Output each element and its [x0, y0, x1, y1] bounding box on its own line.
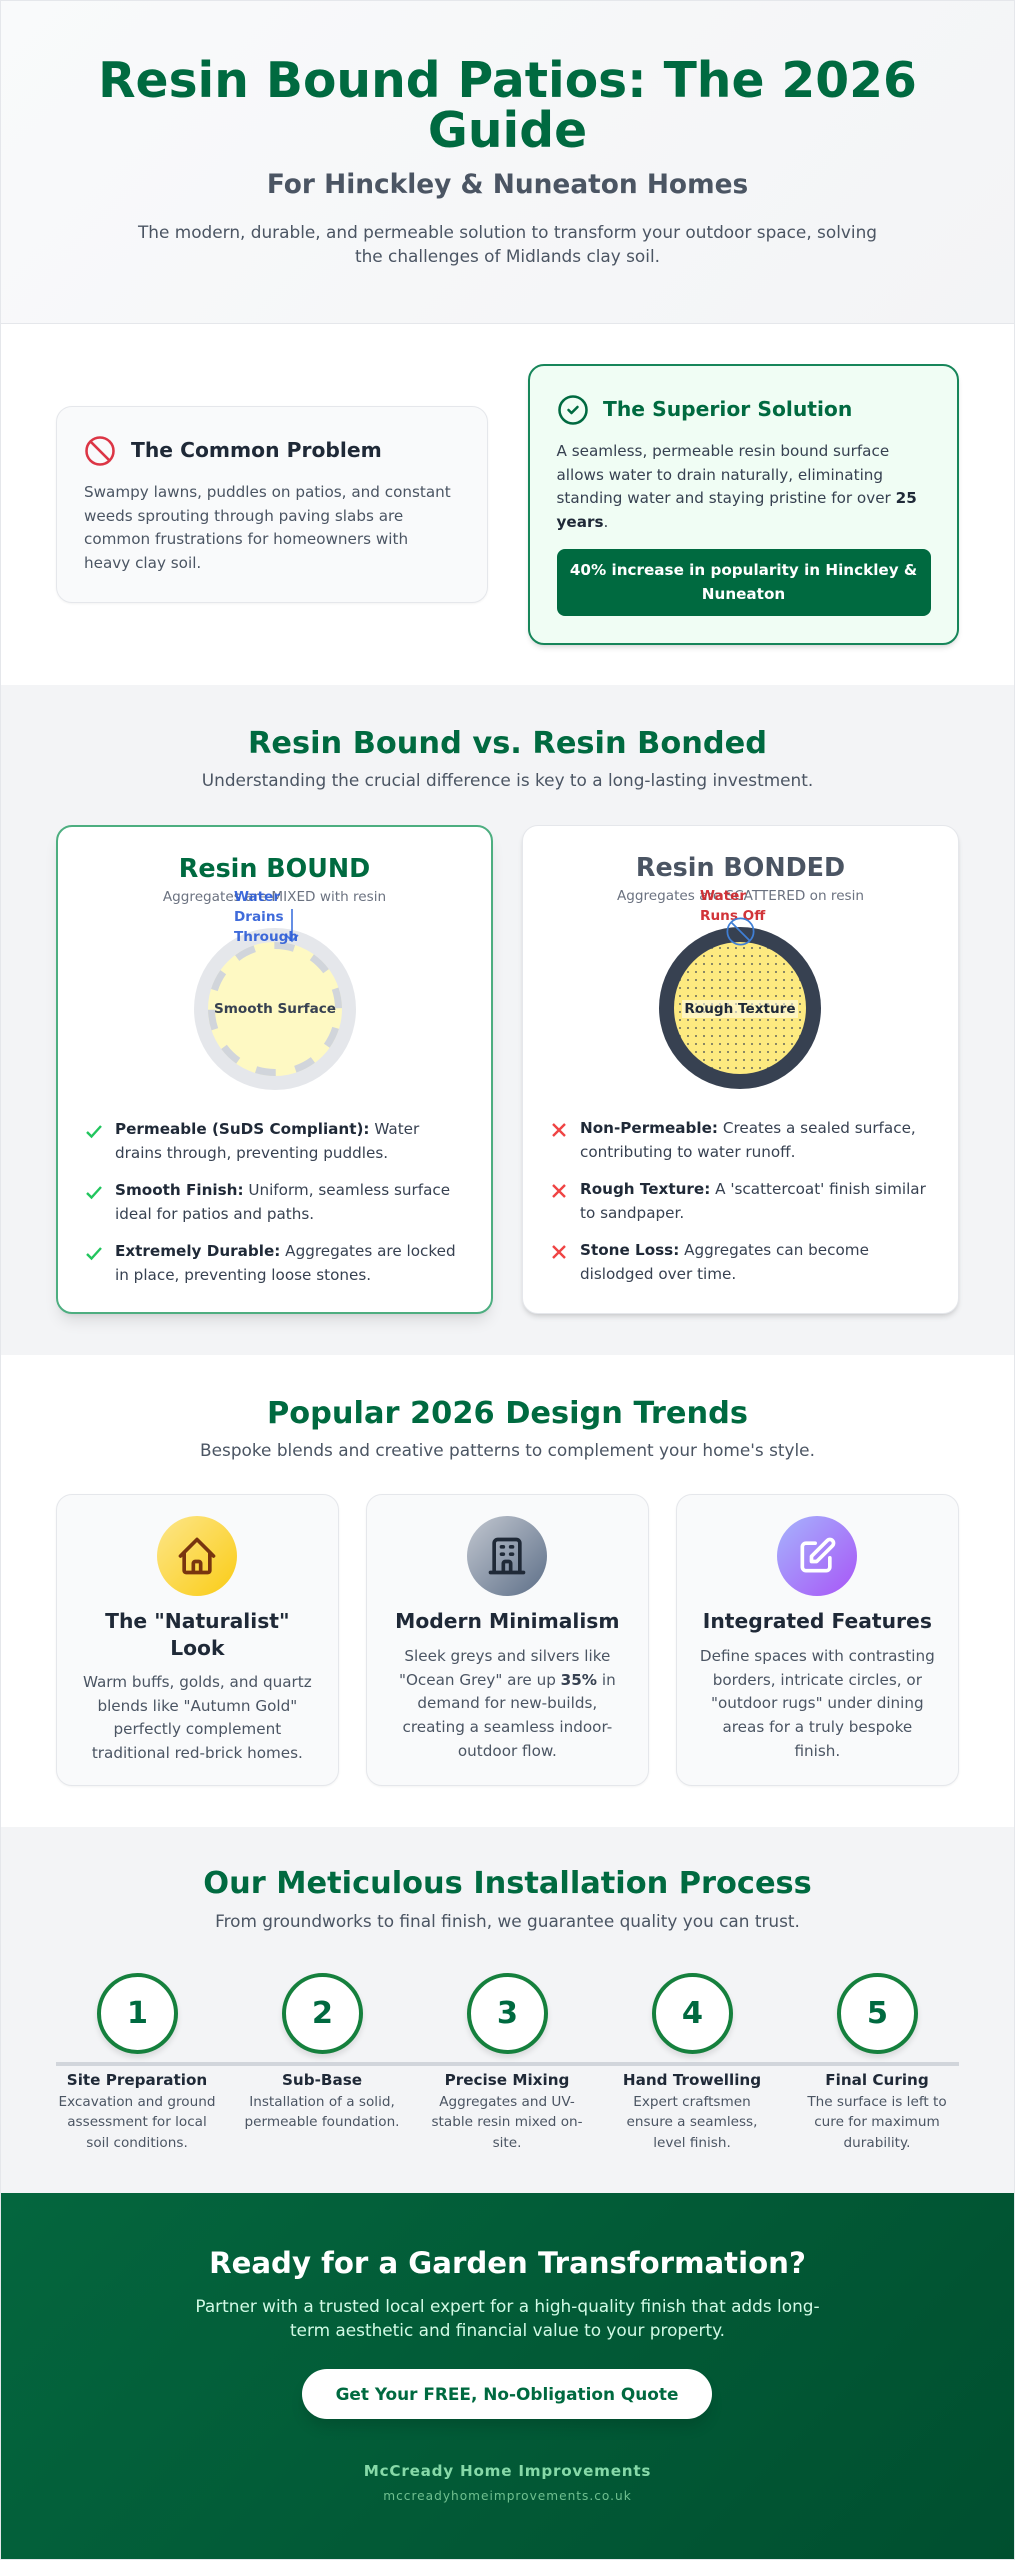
statistic callout: 40% increase in popularity in Hinckley &	[570, 561, 917, 579]
step 5 text: durability.	[844, 2135, 910, 2151]
icon: pencil	[777, 1516, 857, 1596]
benefit: permeable: Permeable (SuDS Compliant): Water	[115, 1120, 419, 1138]
trend heading: Modern Minimalism	[395, 1609, 620, 1633]
section heading: Our Meticulous Installation Process	[203, 1866, 812, 1901]
drawback: stone loss	[580, 1241, 869, 1283]
solution text	[556, 442, 917, 531]
diagram label: Rough Texture	[684, 1001, 796, 1017]
benefit: smooth finish: ideal for patios and paths.	[115, 1205, 314, 1223]
trend heading: The "Naturalist"	[105, 1609, 290, 1633]
CTA button	[302, 2369, 712, 2419]
CTA text: Partner with a trusted local expert for a high-quality finish that adds long-	[195, 2296, 820, 2316]
icon: cross	[552, 1184, 566, 1198]
section subheading: Understanding the crucial difference is key to a long-lasting investment.	[202, 770, 813, 790]
step 4 number	[652, 1973, 733, 2054]
panel: problem and solution	[0, 324, 1015, 685]
step 2 title: Sub-Base	[282, 2071, 362, 2089]
water label: Water	[234, 889, 280, 905]
trend card: naturalist	[56, 1494, 339, 1786]
section subheading: Bespoke blends and creative patterns to complement your home's style.	[200, 1440, 815, 1460]
icon: water blocked	[726, 918, 754, 946]
trend text: Define spaces with contrasting	[700, 1647, 935, 1665]
benefit: smooth finish	[115, 1181, 450, 1223]
step 1 title: Site Preparation	[67, 2071, 207, 2089]
drawback: rough texture: to sandpaper.	[580, 1204, 684, 1222]
problem heading: The Common Problem	[131, 438, 382, 462]
problem text: Swampy lawns, puddles on patios, and constant	[84, 483, 451, 501]
step 4 title: Hand Trowelling	[623, 2071, 761, 2089]
diagram: rough texture circle	[659, 927, 821, 1089]
trend text: "Ocean Grey" are up 35% in	[399, 1671, 616, 1689]
trend text: Sleek greys and silvers like	[404, 1647, 610, 1665]
trend text: demand for new-builds,	[417, 1694, 597, 1712]
step 1 text: assessment for local	[67, 2114, 207, 2130]
CTA text	[195, 2296, 820, 2340]
drawback: stone loss: Stone Loss: Aggregates can become	[580, 1241, 869, 1259]
step 4 text: Expert craftsmen	[633, 2094, 751, 2110]
water label: Through	[234, 929, 298, 945]
company website: mccreadyhomeimprovements.co.uk	[383, 2489, 632, 2503]
problem text: common frustrations for homeowners with	[84, 530, 408, 548]
drawback: non-permeable: Non-Permeable: Creates a sealed surface,	[580, 1119, 916, 1137]
statistic callout	[556, 549, 930, 616]
water label: Water	[700, 888, 746, 904]
trend text	[700, 1647, 935, 1760]
arrow: water drains down	[286, 909, 298, 942]
card subtitle: Aggregates are MIXED with resin	[163, 889, 386, 905]
icon: check	[86, 1186, 102, 1200]
step 1 text	[59, 2094, 215, 2151]
icon: check circle	[558, 395, 588, 425]
statistic callout: Nuneaton	[702, 585, 785, 603]
CTA heading: Ready for a Garden Transformation?	[209, 2246, 806, 2280]
step 3 text: Aggregates and UV-	[439, 2094, 575, 2110]
intro text: the challenges of Midlands clay soil.	[355, 246, 660, 266]
trend text: areas for a truly bespoke	[722, 1718, 912, 1736]
card subtitle: Aggregates are SCATTERED on resin	[617, 888, 864, 904]
intro text: The modern, durable, and permeable solution to transform your outdoor space, solving	[138, 222, 877, 242]
panel: superior solution	[528, 364, 959, 645]
subtitle: For Hinckley & Nuneaton Homes	[267, 169, 748, 200]
panel: call to action	[0, 2193, 1015, 2560]
card title: Resin BOUND	[179, 853, 370, 883]
step 2 number: 2	[312, 1996, 333, 2031]
benefit: smooth finish: Smooth Finish: Uniform, seamless surface	[115, 1181, 450, 1199]
step 4 text: level finish.	[653, 2135, 731, 2151]
benefit: permeable: drains through, preventing puddles.	[115, 1144, 388, 1162]
step 3 text: site.	[493, 2135, 521, 2151]
problem text: weeds sprouting through paving slabs are	[84, 507, 403, 525]
step 3 number: 3	[497, 1996, 518, 2031]
trend text: outdoor flow.	[458, 1742, 557, 1760]
trend card: integrated features	[676, 1494, 959, 1786]
step 2 text	[244, 2094, 400, 2130]
step 4 number: 4	[682, 1996, 703, 2031]
title: Resin Bound Patios: The 2026	[98, 53, 917, 109]
step 1 text: Excavation and ground	[59, 2094, 215, 2110]
CTA button: Get Your FREE, No-Obligation Quote	[336, 2384, 678, 2404]
trend text: perfectly complement	[114, 1720, 281, 1738]
trend text: Warm buffs, golds, and quartz	[83, 1673, 312, 1691]
CTA text: term aesthetic and financial value to your property.	[290, 2320, 725, 2340]
trend text: traditional red-brick homes.	[92, 1744, 303, 1762]
title	[98, 53, 917, 159]
icon: cross	[552, 1123, 566, 1137]
benefit: durable	[115, 1242, 456, 1284]
card title: Resin BONDED	[636, 852, 845, 882]
timeline line	[56, 2062, 959, 2066]
step 3 title: Precise Mixing	[445, 2071, 569, 2089]
step 5 title: Final Curing	[825, 2071, 929, 2089]
icon: house	[157, 1516, 237, 1596]
problem text: heavy clay soil.	[84, 554, 201, 572]
section heading: Resin Bound vs. Resin Bonded	[248, 726, 767, 761]
icon: prohibited sign	[85, 436, 115, 466]
panel: bound vs bonded comparison	[0, 685, 1015, 1355]
drawback: non-permeable	[580, 1119, 916, 1161]
step 5 number	[837, 1973, 918, 2054]
panel: resin bound	[56, 825, 493, 1314]
drawback: non-permeable: contributing to water runoff.	[580, 1143, 795, 1161]
benefit: durable: in place, preventing loose stones.	[115, 1266, 371, 1284]
step 5 number: 5	[867, 1996, 888, 2031]
panel: resin bonded	[522, 825, 959, 1314]
step 4 text: ensure a seamless,	[627, 2114, 757, 2130]
header panel	[0, 0, 1015, 324]
step 5 text	[807, 2094, 947, 2151]
problem text	[84, 483, 451, 572]
step 2 text: permeable foundation.	[244, 2114, 400, 2130]
water label	[700, 888, 766, 924]
water label: Runs Off	[700, 908, 765, 924]
water label	[234, 889, 298, 945]
intro text	[138, 222, 877, 266]
step 1 text: soil conditions.	[86, 2135, 188, 2151]
step 3 text: stable resin mixed on-	[431, 2114, 583, 2130]
drawback: rough texture: Rough Texture: A 'scattercoat' finish similar	[580, 1180, 926, 1198]
solution text: years.	[556, 513, 608, 531]
panel: design trends	[0, 1355, 1015, 1827]
step 3 number	[467, 1973, 548, 2054]
trend text: blends like "Autumn Gold"	[97, 1697, 297, 1715]
solution text: A seamless, permeable resin bound surface	[556, 442, 889, 460]
icon: building	[467, 1516, 547, 1596]
trend text: borders, intricate circles, or	[713, 1671, 922, 1689]
trend text: creating a seamless indoor-	[402, 1718, 612, 1736]
benefit: permeable	[115, 1120, 420, 1162]
benefit: durable: Extremely Durable: Aggregates are locked	[115, 1242, 456, 1260]
trend card: minimalism	[366, 1494, 649, 1786]
icon: check	[86, 1125, 102, 1138]
solution text: allows water to drain naturally, eliminating	[556, 466, 883, 484]
panel: installation process	[0, 1827, 1015, 2193]
icon: cross	[552, 1245, 566, 1259]
step 4 text	[627, 2094, 757, 2151]
step 5 text: cure for maximum	[814, 2114, 940, 2130]
step 2 text: Installation of a solid,	[249, 2094, 395, 2110]
drawback: stone loss: dislodged over time.	[580, 1265, 736, 1283]
step 5 text: The surface is left to	[807, 2094, 947, 2110]
trend text: "outdoor rugs" under dining	[711, 1694, 924, 1712]
section subheading: From groundworks to final finish, we guarantee quality you can trust.	[215, 1911, 800, 1931]
company name: McCready Home Improvements	[364, 2462, 651, 2480]
step 1 number	[97, 1973, 178, 2054]
icon: check	[86, 1247, 102, 1260]
trend text: finish.	[794, 1742, 840, 1760]
diagram label: Smooth Surface	[214, 1001, 336, 1017]
step 3 text	[431, 2094, 583, 2151]
step 2 number	[282, 1973, 363, 2054]
trend text	[399, 1647, 616, 1760]
diagram: smooth surface circle	[194, 928, 356, 1090]
section heading: Popular 2026 Design Trends	[267, 1396, 748, 1431]
trend heading: Integrated Features	[703, 1609, 932, 1633]
trend heading: Look	[170, 1636, 224, 1660]
panel: common problem	[56, 406, 488, 603]
trend text	[83, 1673, 312, 1762]
title: Guide	[428, 103, 587, 159]
trend heading	[105, 1609, 290, 1660]
water label: Drains	[234, 909, 284, 925]
step 1 number: 1	[127, 1996, 148, 2031]
drawback: rough texture	[580, 1180, 926, 1222]
solution heading: The Superior Solution	[603, 397, 852, 421]
solution text: standing water and staying pristine for over 25	[556, 489, 917, 507]
